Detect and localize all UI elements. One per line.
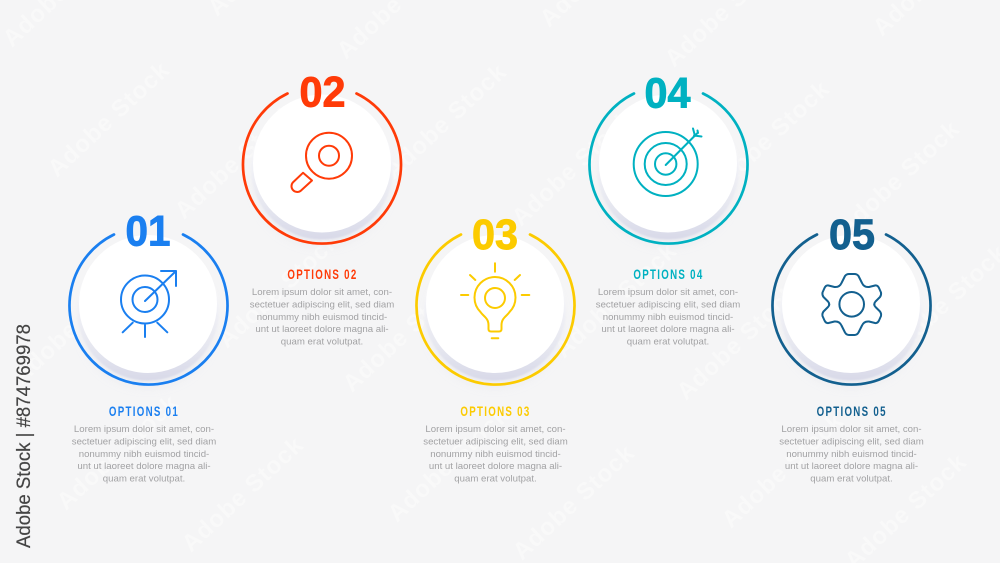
text block 05: sectetuer adipiscing elit, sed diam bbox=[779, 436, 924, 447]
number 03: 03 bbox=[472, 211, 518, 259]
watermark pattern: Adobe Stock bbox=[383, 401, 515, 527]
panel: option 05 bbox=[772, 211, 930, 485]
watermark pattern: Adobe Stock bbox=[833, 115, 965, 241]
text block 03: quam erat volutpat. bbox=[454, 474, 537, 485]
panel: option 02 bbox=[243, 68, 401, 348]
title: options 03: OPTIONS 03 bbox=[460, 405, 531, 419]
watermark pattern: Adobe Stock bbox=[507, 105, 639, 231]
text block 03: nonummy nibh euismod tincid- bbox=[430, 449, 561, 460]
disc 05 bbox=[780, 235, 922, 384]
watermark pattern: Adobe Stock bbox=[508, 439, 640, 563]
text block 02: unt ut laoreet dolore magna ali- bbox=[255, 324, 389, 335]
text block 05: quam erat volutpat. bbox=[810, 474, 893, 485]
text block 05: Lorem ipsum dolor sit amet, con- bbox=[781, 424, 922, 435]
ring 01 bbox=[70, 234, 228, 385]
text block 03: sectetuer adipiscing elit, sed diam bbox=[423, 436, 568, 447]
watermark pattern: Adobe Stock bbox=[703, 75, 835, 201]
number 05: 05 bbox=[829, 211, 875, 259]
title: options 02: OPTIONS 02 bbox=[287, 268, 358, 282]
watermark pattern: Adobe Stock bbox=[380, 58, 512, 184]
ring 02 bbox=[243, 94, 401, 244]
disc 02 bbox=[251, 94, 393, 243]
watermark pattern: Adobe Stock bbox=[52, 389, 184, 515]
text block 01: nonummy nibh euismod tincid- bbox=[79, 449, 209, 460]
panel: option 04 bbox=[589, 70, 748, 348]
number 01: 01 bbox=[126, 208, 170, 256]
title: options 04: OPTIONS 04 bbox=[633, 268, 704, 282]
text block 05: unt ut laoreet dolore magna ali- bbox=[785, 461, 918, 472]
number 04: 04 bbox=[644, 70, 691, 118]
disc 01 bbox=[77, 235, 219, 384]
disc 04 bbox=[597, 94, 739, 243]
text block 02: Lorem ipsum dolor sit amet, con- bbox=[252, 287, 392, 298]
disc 03 bbox=[424, 235, 566, 384]
watermark pattern: Adobe Stock bbox=[43, 56, 175, 182]
stock credit: Adobe Stock | #874769978 bbox=[13, 324, 35, 548]
icon: magnifier bbox=[291, 133, 352, 192]
title: options 01: OPTIONS 01 bbox=[109, 405, 179, 419]
text block 02 bbox=[250, 287, 394, 348]
text block 01 bbox=[72, 424, 216, 485]
panel: option 01 bbox=[70, 208, 228, 485]
text block 02: nonummy nibh euismod tincid- bbox=[257, 312, 387, 323]
text block 03 bbox=[423, 424, 568, 485]
icon: bullseye with dart bbox=[634, 128, 702, 196]
text block 03: Lorem ipsum dolor sit amet, con- bbox=[425, 424, 566, 435]
text block 01: Lorem ipsum dolor sit amet, con- bbox=[74, 424, 214, 435]
text block 01: unt ut laoreet dolore magna ali- bbox=[77, 461, 211, 472]
watermark pattern: Adobe Stock bbox=[717, 407, 849, 533]
watermark pattern: Adobe Stock bbox=[672, 279, 804, 405]
text block 04: unt ut laoreet dolore magna ali- bbox=[601, 324, 735, 335]
icon: gear bbox=[822, 274, 881, 335]
text block 05: nonummy nibh euismod tincid- bbox=[786, 449, 917, 460]
text block 04: nonummy nibh euismod tincid- bbox=[603, 312, 733, 323]
number 02: 02 bbox=[300, 68, 346, 116]
text block 04: sectetuer adipiscing elit, sed diam bbox=[596, 299, 740, 310]
ring 04 bbox=[589, 94, 748, 244]
ring 03 bbox=[416, 234, 574, 385]
watermark pattern: Adobe Stock bbox=[170, 98, 302, 224]
ring 05 bbox=[772, 234, 930, 385]
text block 01: sectetuer adipiscing elit, sed diam bbox=[72, 436, 216, 447]
text block 04: quam erat volutpat. bbox=[627, 337, 709, 348]
watermark pattern: Adobe Stock bbox=[177, 431, 309, 557]
text block 01: quam erat volutpat. bbox=[103, 474, 185, 485]
text block 02: sectetuer adipiscing elit, sed diam bbox=[250, 299, 394, 310]
text block 02: quam erat volutpat. bbox=[281, 337, 363, 348]
watermark pattern: Adobe Stock bbox=[8, 263, 140, 389]
icon: light bulb bbox=[461, 263, 529, 338]
text block 04 bbox=[596, 287, 740, 348]
watermark pattern: Adobe Stock bbox=[550, 237, 682, 363]
watermark pattern: Adobe Stock bbox=[213, 227, 345, 353]
text block 04: Lorem ipsum dolor sit amet, con- bbox=[598, 287, 738, 298]
icon: target with arrow bbox=[121, 271, 176, 337]
text block 05 bbox=[779, 424, 924, 485]
watermark pattern: Adobe Stock bbox=[338, 271, 470, 397]
title: options 05: OPTIONS 05 bbox=[817, 405, 887, 419]
text block 03: unt ut laoreet dolore magna ali- bbox=[429, 461, 562, 472]
panel: option 03 bbox=[416, 211, 574, 485]
